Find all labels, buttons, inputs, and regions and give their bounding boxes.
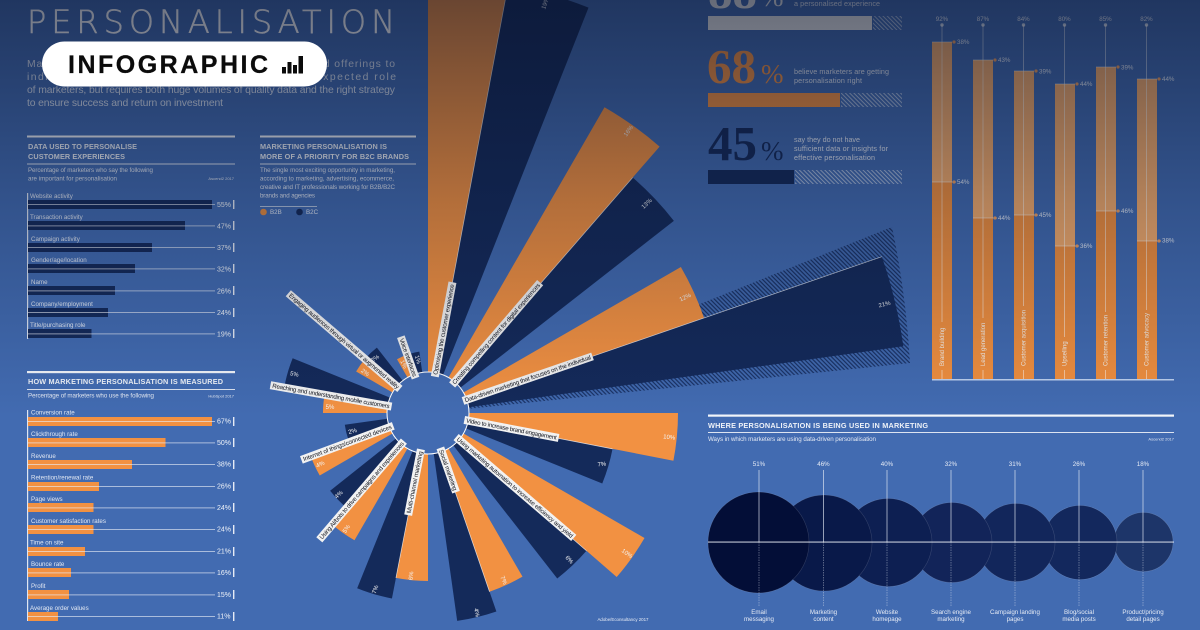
segment values: 36% <box>1080 243 1093 250</box>
category labels: Using AI/bots to drive campaigns and experiences <box>318 441 406 541</box>
percentage labels: 4% <box>315 460 326 470</box>
bar chart: data used: 37% <box>217 245 231 252</box>
bubble chart: Product/pricing <box>1122 609 1164 616</box>
bubble chart: Campaign landing <box>990 609 1040 616</box>
bar category labels: Brand building <box>940 328 946 366</box>
heading: B2C priority: MORE OF A PRIORITY FOR B2C BRANDS <box>260 152 409 161</box>
lower bar segments <box>932 182 1157 380</box>
bubble chart: marketing <box>937 616 965 623</box>
bar chart: measured: Revenue <box>31 453 56 460</box>
bar chart: measured: 38% <box>217 462 231 468</box>
segment values: 39% <box>1039 68 1052 76</box>
bar category labels <box>940 310 1150 366</box>
hub ring <box>387 372 469 454</box>
total values: 82% <box>1140 16 1153 23</box>
bubble chart: Website <box>876 609 899 616</box>
stat 68%: believe marketers are getting <box>794 67 889 76</box>
stacked bar chart <box>932 16 1175 380</box>
bubble chart: 46% <box>817 461 830 468</box>
bar chart: data used <box>28 193 234 338</box>
stat 45%: effective personalisation <box>794 153 875 162</box>
intro text: to ensure success and return on investment <box>27 98 223 109</box>
bar chart: measured: 11% <box>217 614 230 620</box>
category labels: Engaging audiences through virtual or augmented reality <box>287 292 401 391</box>
radial chart: opportunities <box>270 0 912 625</box>
subtitle: data used: are important for personalisation <box>28 176 118 182</box>
subtitle: measured <box>28 392 235 400</box>
bar chart: measured: Clickthrough rate <box>31 431 78 438</box>
bar chart: data used: 55% <box>217 202 231 209</box>
source note: Adobe/Econsultancy 2017 <box>597 617 649 622</box>
bubble chart: Search engine <box>931 609 972 616</box>
bubble chart: Blog/social <box>1064 609 1094 616</box>
bubble chart: detail pages <box>1126 616 1160 623</box>
percentage labels: 1% <box>413 355 421 365</box>
segment values: 44% <box>1080 81 1093 88</box>
subtitle: data used: Ascend2 2017 <box>208 176 235 181</box>
bar chart: data used: Website activity <box>30 193 74 200</box>
bubble chart: content <box>813 616 834 623</box>
segment values: 39% <box>1121 64 1134 72</box>
subtitle: where used: Ascend2 2017 <box>1148 436 1175 442</box>
bar chart: measured: 24% <box>217 526 231 534</box>
stat 68%: 68 <box>707 39 756 94</box>
stat 45%: sufficient data or insights for <box>794 144 889 153</box>
total values: 87% <box>977 16 990 23</box>
percentage labels: 4% <box>472 608 480 618</box>
wedges <box>285 0 912 625</box>
category labels: Video to increase brand engagement <box>466 417 558 442</box>
bar chart: measured: 50% <box>217 440 231 447</box>
segment values: 44% <box>1162 76 1175 83</box>
heading: data used: CUSTOMER EXPERIENCES <box>28 152 125 161</box>
stat 68%: % <box>761 59 784 89</box>
bubble chart: 26% <box>1073 461 1086 468</box>
category labels <box>270 280 594 542</box>
total values: 80% <box>1058 16 1071 23</box>
bubble chart: 32% <box>945 461 958 468</box>
bubble chart: 51% <box>753 461 766 468</box>
category labels: Voice interfaces <box>398 338 418 378</box>
bar chart: data used: 19% <box>217 332 231 338</box>
intro text <box>27 59 396 109</box>
percentage labels: 13% <box>641 198 654 211</box>
total values: 85% <box>1099 16 1112 23</box>
percentage labels: 5% <box>289 371 300 379</box>
subtitle: where used <box>708 436 1175 443</box>
badge: infographic: INFOGRAPHIC <box>68 51 268 79</box>
heading: B2C priority: MARKETING PERSONALISATION IS <box>260 142 387 151</box>
segment values: 38% <box>957 39 970 46</box>
category labels: Reaching and understanding mobile customers <box>272 383 390 410</box>
stat 68% <box>707 39 902 107</box>
percentage labels: 6% <box>409 571 415 580</box>
legend: B2B <box>270 209 282 216</box>
bar chart: data used: Transaction activity <box>30 214 84 221</box>
bar category labels: Upselling <box>1062 341 1068 366</box>
bar chart: data used: 26% <box>217 288 231 296</box>
percentage labels: 12% <box>679 293 693 303</box>
bar category labels: Lead generation <box>981 323 987 366</box>
percentage labels: 5% <box>326 405 335 411</box>
bar chart: measured: 15% <box>217 592 231 599</box>
icon: bar chart <box>282 56 303 74</box>
body text: B2C priority: brands and agencies <box>260 192 315 200</box>
bubble chart: pages <box>1007 616 1023 623</box>
category labels: Using marketing automation to increase efficiency and yield <box>455 436 574 540</box>
heading: B2C priority <box>260 142 409 161</box>
total values: 84% <box>1017 16 1030 23</box>
heading: where used: WHERE PERSONALISATION IS BEING USED IN MARKETING <box>708 421 928 430</box>
bar chart: measured: 67% <box>217 418 231 426</box>
segment values: 38% <box>1162 238 1175 244</box>
bar chart: measured: Conversion rate <box>31 410 75 416</box>
bar chart: measured: Profit <box>31 583 46 590</box>
percentage labels: 2% <box>359 368 370 379</box>
percentage labels: 2% <box>370 354 381 364</box>
bar chart: measured: Time on site <box>30 540 64 546</box>
bar category labels: Customer acquisition <box>1022 310 1028 366</box>
segment values: 44% <box>998 215 1011 222</box>
bubble chart: Email <box>751 609 767 616</box>
subtitle: measured: Percentage of marketers who use the following <box>28 392 155 400</box>
total values: 92% <box>936 16 949 23</box>
bar chart: measured: 24% <box>217 505 231 512</box>
bar chart: measured: Page views <box>31 496 63 503</box>
percentage labels: 2% <box>348 428 358 436</box>
bar chart: measured: Bounce rate <box>31 561 65 568</box>
bar chart: measured: Retention/renewal rate <box>31 474 94 482</box>
percentage labels: 7% <box>372 584 380 595</box>
category labels: Creating compelling content for digital experiences <box>451 282 542 386</box>
percentage labels: 10% <box>663 434 676 442</box>
stat 45% <box>708 116 902 184</box>
bar category labels: Customer retention <box>1104 315 1110 366</box>
bar chart: measured: 16% <box>217 570 231 577</box>
percentage labels: 10% <box>620 548 634 560</box>
segment values: 45% <box>1039 212 1052 219</box>
body text: B2C priority: according to marketing, advertising, ecommerce, <box>260 176 394 182</box>
heading: data used: DATA USED TO PERSONALISE <box>28 142 137 151</box>
bubble chart: media posts <box>1062 616 1096 623</box>
panel: B2C priority <box>260 136 416 216</box>
bar chart: data used: 47% <box>217 224 231 230</box>
category labels: Multi-channel marketing <box>406 451 425 514</box>
bar chart: measured: Average order values <box>30 605 89 612</box>
bar chart: data used: Campaign activity <box>31 236 81 243</box>
intro text: Marketing has shifted towards personalised content and offerings to <box>27 59 395 70</box>
bar chart: data used: Name <box>31 279 48 286</box>
category labels: Social marketing <box>437 449 458 492</box>
heading: measured: HOW MARKETING PERSONALISATION IS MEASURED <box>28 377 223 386</box>
total values <box>936 16 1153 23</box>
segment values: 54% <box>957 179 970 186</box>
bar chart: measured: Customer satisfaction rates <box>31 518 106 525</box>
bubble chart <box>708 461 1174 623</box>
legend: B2C <box>306 209 319 216</box>
subtitle: data used: Percentage of marketers who say the following <box>28 167 154 174</box>
upper bar segments <box>932 42 1157 246</box>
bar chart: data used: 32% <box>217 266 231 274</box>
subtitle: where used: Ways in which marketers are using data-driven personalisation <box>708 436 877 443</box>
bar chart: measured: 21% <box>217 548 231 556</box>
bar category labels: Customer advocacy <box>1144 313 1150 366</box>
bubble chart: Marketing <box>810 609 838 616</box>
subtitle: measured: HubSpot 2017 <box>208 394 235 398</box>
percentage labels <box>289 0 892 618</box>
subtitle: data used <box>28 167 235 182</box>
stat 68%: personalisation right <box>794 76 862 85</box>
stat 88% <box>708 0 902 30</box>
bubble chart: 18% <box>1137 461 1150 468</box>
body text: B2C priority: creative and IT professionals working for B2B/B2C <box>260 184 396 191</box>
bubble chart: messaging <box>744 616 775 623</box>
percentage labels: 7% <box>498 575 508 586</box>
bar chart: measured <box>28 410 234 621</box>
stat 45%: % <box>761 136 784 166</box>
badge: infographic <box>42 42 327 86</box>
percentage labels: 4% <box>334 490 345 500</box>
title: PERSONALISATION <box>27 3 395 41</box>
percentage labels: 21% <box>878 301 892 309</box>
heading: data used <box>28 142 137 161</box>
category labels: Data-driven marketing that focuses on the individual <box>464 354 592 404</box>
percentage labels: 16% <box>623 124 635 138</box>
intro text: of marketers, but requires both huge volumes of quality data and the right strategy <box>27 85 396 96</box>
bubble chart: homepage <box>872 616 902 623</box>
intro text: individual customers and it has now become an expected role <box>27 72 396 83</box>
segment values: 46% <box>1121 208 1134 215</box>
bubble chart: 40% <box>881 461 894 468</box>
panel: where personalisation is used <box>708 414 1175 623</box>
bubble chart: 31% <box>1009 461 1022 468</box>
bar chart: data used: Title/purchasing role <box>30 322 86 329</box>
body text: B2C priority: The single most exciting opportunity in marketing, <box>260 167 395 174</box>
panel: how personalisation is measured <box>27 371 235 621</box>
category labels: Internet of things/connected devices <box>302 424 393 463</box>
bar chart: measured: 26% <box>217 484 231 490</box>
percentage labels: 6% <box>564 555 574 566</box>
body text: B2C priority <box>260 167 396 200</box>
legend <box>260 209 319 216</box>
percentage labels: 1% <box>398 359 408 370</box>
segment values: 43% <box>998 57 1011 64</box>
stat 45%: 45 <box>708 116 757 171</box>
percentage labels: 5% <box>342 524 353 535</box>
panel: data used to personalise <box>27 136 235 339</box>
bar chart: data used: Company/employment <box>31 301 93 308</box>
bar chart: data used: 24% <box>217 310 231 317</box>
panel: statistics <box>707 0 902 184</box>
category labels: Optimising the customer experience <box>432 283 456 375</box>
segment values <box>957 39 1175 250</box>
stat 45%: say they do not have <box>794 135 860 144</box>
percentage labels: 7% <box>597 462 607 468</box>
bar chart: data used: Gender/age/location <box>31 257 87 264</box>
